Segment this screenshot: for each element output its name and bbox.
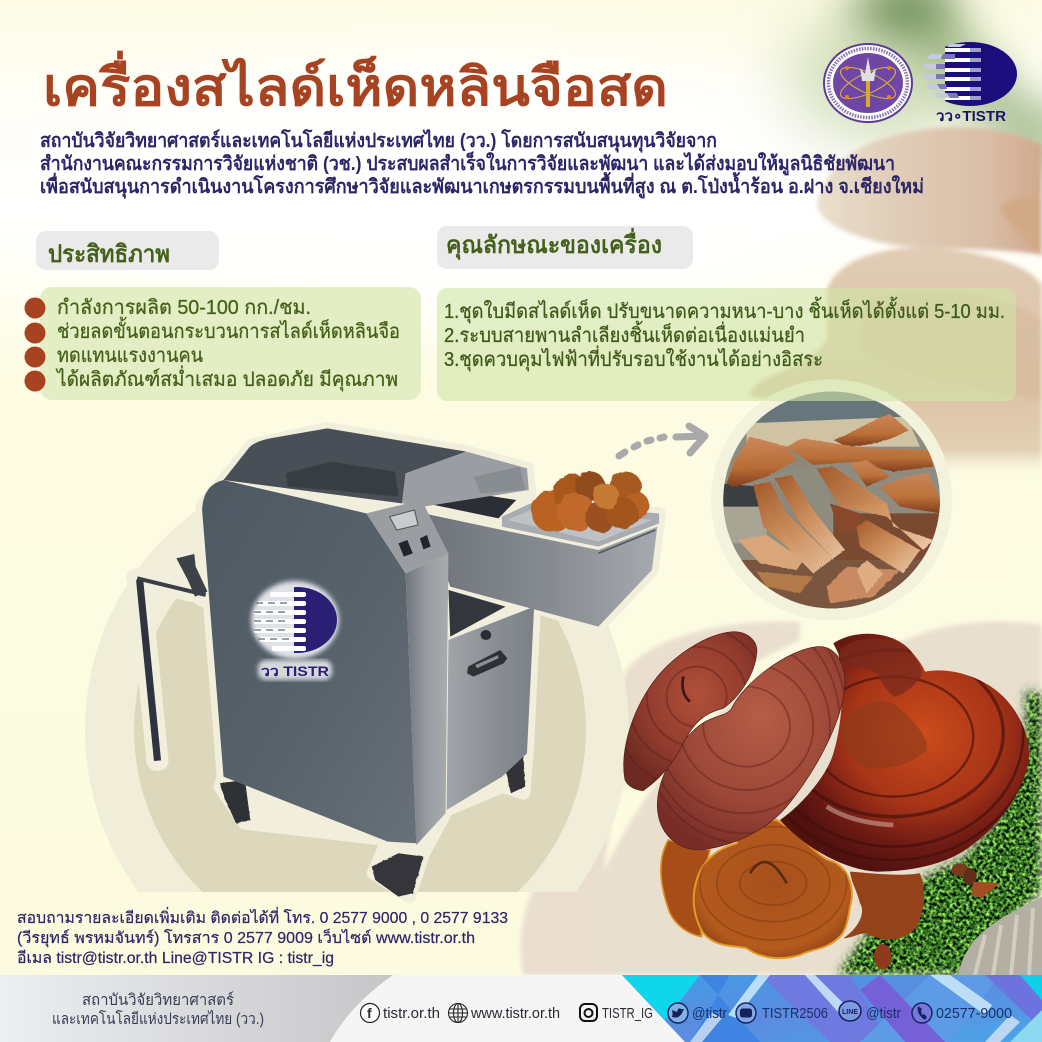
footer social links: @tistr — [692, 1006, 727, 1022]
machine logo — [251, 581, 339, 680]
footer social links: www.tistr.or.th — [470, 1006, 560, 1022]
footer organisation name: และเทคโนโลยีแห่งประเทศไทย (วว.) — [52, 1010, 264, 1028]
photo: sliced mushrooms — [711, 379, 952, 621]
control panel — [366, 500, 448, 573]
panel: efficiency list — [24, 287, 421, 400]
footer organisation name: สถาบันวิจัยวิทยาศาสตร์ — [82, 991, 234, 1009]
footer diamond pattern — [622, 975, 1042, 1042]
mushrooms in machine tray — [531, 471, 649, 532]
wheels — [220, 757, 525, 897]
logo: TISTR — [923, 42, 1017, 125]
small mushrooms on moss — [874, 864, 1000, 969]
icon: globe — [448, 1003, 468, 1023]
footer social links: 02577-9000 — [936, 1006, 1012, 1022]
heading: machine features: คุณลักษณะของเครื่อง — [446, 227, 662, 261]
panel: machine features list: 1.ชุดใบมีดสไลด์เห็ด ปรับขนาดความหนา-บาง ชิ้นเห็ดได้ตั้งแต่ 5-10 มม. — [444, 297, 1005, 324]
background mushroom: upper right — [748, 127, 1042, 478]
panel: machine features list — [437, 288, 1016, 401]
heading: machine features — [437, 226, 693, 269]
lever — [137, 554, 207, 761]
mushroom: small upper left — [623, 631, 758, 791]
contact details: อีเมล tistr@tistr.or.th Line@TISTR IG : tistr_ig — [17, 950, 334, 967]
contact details: (วีรยุทธ์ พรหมจันทร์) โทรสาร 0 2577 9009 เว็บไซต์ www.tistr.or.th — [17, 928, 475, 948]
icon: youtube — [736, 1003, 756, 1023]
logo: ministry seal — [824, 44, 912, 122]
icon: instagram — [580, 1004, 597, 1021]
icon: line: LINE — [842, 1009, 858, 1016]
intro paragraph: สำนักงานคณะกรรมการวิจัยแห่งชาติ (วช.) ประสบผลสำเร็จในการวิจัยและพัฒนา และได้ส่งมอบให้มูลนิธิชัยพัฒนา — [40, 151, 895, 177]
heading: efficiency: ประสิทธิภาพ — [48, 241, 170, 268]
mushroom: large right — [780, 634, 1029, 872]
intro paragraph: สถาบันวิจัยวิทยาศาสตร์และเทคโนโลยีแห่งประเทศไทย (วว.) โดยการสนับสนุนทุนวิจัยจาก — [40, 129, 717, 153]
contact details — [17, 907, 508, 967]
mushroom: center orange — [694, 820, 852, 958]
arrow: dotted to sliced mushrooms — [619, 426, 705, 456]
large reishi mushrooms — [610, 593, 1037, 969]
list text: ทดแทนแรงงานคน — [57, 345, 203, 367]
side strip — [406, 553, 448, 845]
moss ground — [838, 690, 1042, 975]
footer social links: TISTR_IG — [602, 1006, 653, 1022]
footer organisation name — [52, 991, 264, 1028]
footer social links — [360, 1001, 1012, 1023]
machine logo: วว TISTR — [261, 663, 329, 679]
icon: twitter — [668, 1003, 688, 1023]
icon: phone — [912, 1003, 932, 1023]
cabinet and recess — [447, 590, 534, 810]
icon: facebook: f — [367, 1005, 372, 1021]
footer social links: tistr.or.th — [383, 1006, 440, 1022]
intro paragraph: เพื่อสนับสนุนการดำเนินงานโครงการศึกษาวิจัยและพัฒนาเกษตรกรรมบนพื้นที่สูง ณ ต.โป่งน้ำร้อน อ.ฝาง จ.เชียงใหม่ — [40, 171, 924, 200]
machine photo — [137, 428, 659, 897]
contact details: สอบถามรายละเอียดเพิ่มเติม ติดต่อได้ที่ โทร. 0 2577 9000 , 0 2577 9133 — [17, 907, 508, 927]
list text: ช่วยลดขั้นตอนกระบวนการสไลด์เห็ดหลินจือ — [57, 317, 400, 343]
panel: machine features list: 3.ชุดควบคุมไฟฟ้าที่ปรับรอบใช้งานได้อย่างอิสระ — [444, 345, 823, 372]
panel: machine features list: 2.ระบบสายพานลำเลียงชิ้นเห็ดต่อเนื่องแม่นยำ — [444, 321, 805, 347]
bullets — [24, 298, 46, 392]
background mushroom: lower right — [520, 621, 1042, 975]
footer social links: TISTR2506 — [762, 1006, 828, 1022]
decorative circle behind machine — [85, 512, 629, 892]
heading: efficiency — [36, 231, 219, 270]
feed chute — [423, 492, 659, 627]
list text — [55, 297, 400, 392]
front panel — [202, 480, 416, 843]
mushroom: large center — [656, 646, 846, 850]
icon: line — [839, 1001, 861, 1021]
hood — [224, 428, 529, 507]
logo: TISTR: วว∘TISTR — [936, 108, 1006, 125]
icon: facebook — [360, 1004, 380, 1022]
intro paragraph — [40, 129, 924, 200]
list text: กำลังการผลิต 50-100 กก./ชม. — [57, 297, 311, 319]
machine halo — [137, 428, 659, 897]
footer band — [0, 975, 1042, 1042]
list text: ได้ผลิตภัณฑ์สม่ำเสมอ ปลอดภัย มีคุณภาพ — [55, 365, 398, 392]
mushroom: back lower left — [661, 840, 710, 937]
title: เครื่องสไลด์เห็ดหลินจือสด — [43, 51, 668, 117]
footer social links: @tistr — [866, 1006, 901, 1022]
mushroom: back lower right — [843, 872, 924, 940]
